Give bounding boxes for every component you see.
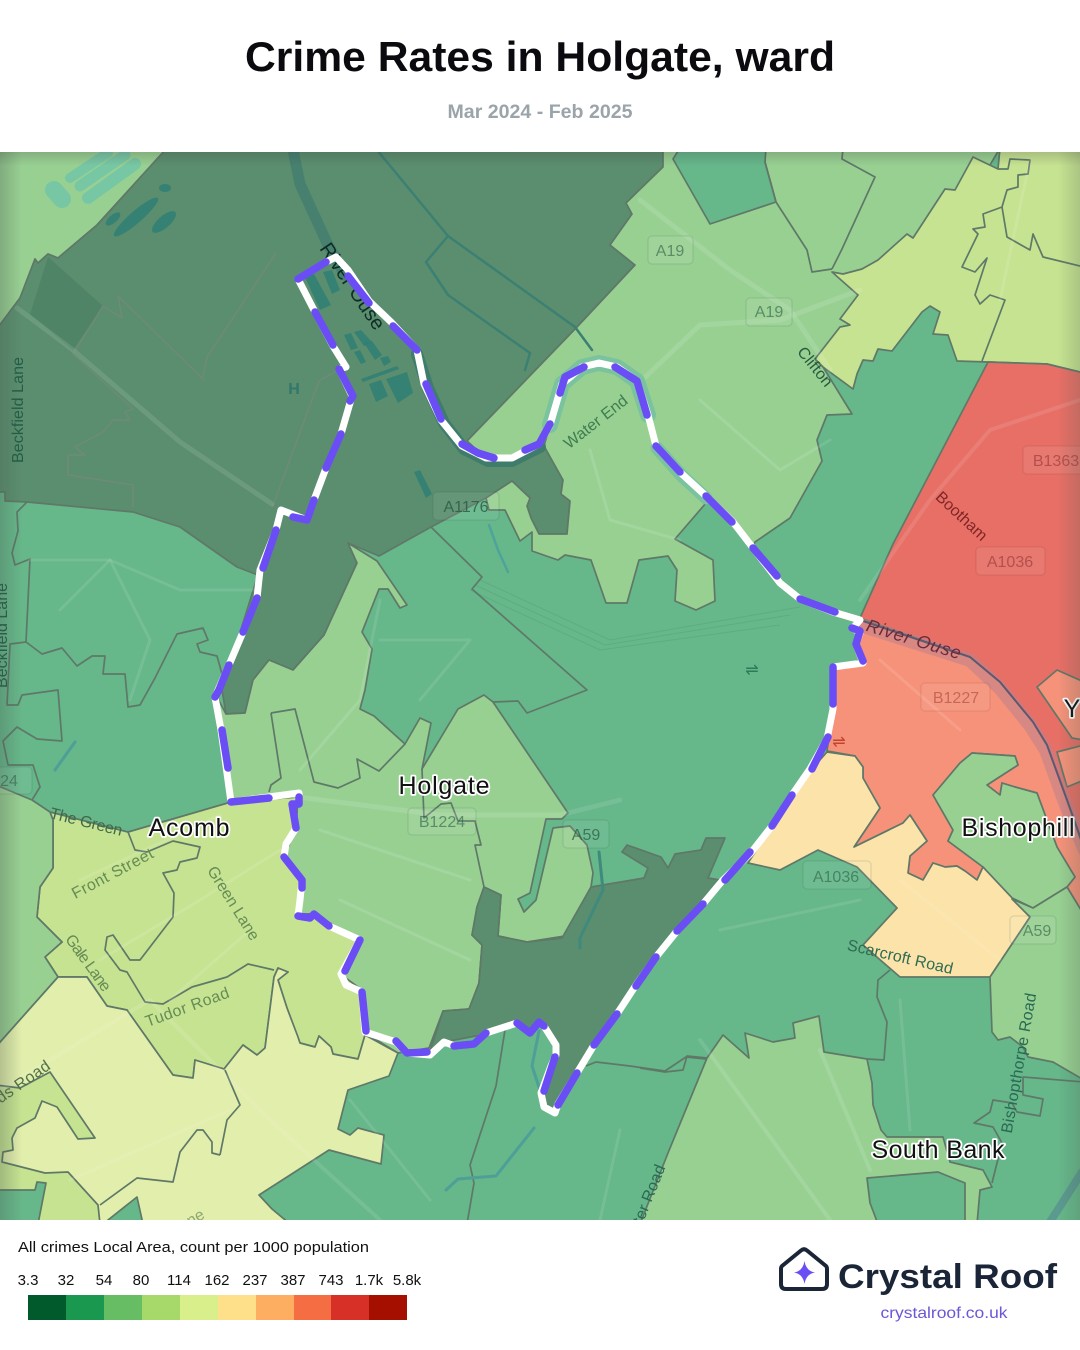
zone boundaries north	[765, 148, 1080, 361]
road number shields: B1224	[419, 814, 465, 831]
road number shields: A19	[755, 304, 783, 321]
place names: Bishophill	[962, 814, 1074, 842]
lake stripes top-left	[54, 153, 135, 199]
legend colour scale	[28, 1295, 407, 1320]
street names: Green Lane	[203, 863, 262, 944]
zone: Bishophill light green	[933, 753, 1075, 915]
zone: small medium green patches south-west	[0, 1182, 143, 1224]
zone: north dark green	[0, 148, 663, 714]
zone: Micklegate salmon	[827, 620, 1080, 915]
zone: Clifton lime	[815, 148, 1080, 389]
place names: South Bank	[872, 1136, 1005, 1164]
legend value labels: 237	[242, 1272, 268, 1289]
title: Crime Rates in Holgate, ward	[245, 33, 835, 80]
zone: Dringhouses pale yellow	[0, 968, 398, 1224]
website: crystalroof.co.uk	[880, 1305, 1009, 1322]
legend value labels: 32	[58, 1272, 74, 1289]
street names: The Green	[48, 805, 124, 840]
zone: Water End light green	[486, 363, 715, 610]
street names: H	[288, 381, 300, 398]
legend	[18, 1239, 422, 1320]
street names: Beckfield Lane	[10, 357, 27, 463]
legend value labels: 387	[280, 1272, 306, 1289]
internal ward lines	[3, 253, 1080, 1224]
brand name: Crystal Roof	[838, 1258, 1058, 1296]
street names: ter Road	[630, 1162, 669, 1226]
faint road network	[0, 160, 1080, 1220]
road number shields: B1227	[933, 690, 979, 707]
zone: Holgate light green	[217, 543, 593, 1053]
place names: Holgate	[398, 772, 490, 800]
road number shields: A59	[1023, 923, 1051, 940]
zone: South Bank light green	[640, 1016, 992, 1224]
railway lines	[470, 580, 800, 650]
legend value labels: 1.7k	[355, 1272, 384, 1289]
street names: ⇌	[832, 734, 846, 751]
legend value labels	[18, 1272, 422, 1289]
legend value labels: 5.8k	[393, 1272, 422, 1289]
road number shields: A1176	[443, 499, 489, 516]
street names: River Ouse	[315, 239, 389, 334]
street names: Gale Lane	[61, 932, 114, 995]
zone: west light green strip	[0, 785, 62, 1047]
map edge vignette	[0, 152, 1080, 1220]
road number shields: A19	[656, 243, 684, 260]
legend value labels: 743	[318, 1272, 344, 1289]
road number shields: 24	[0, 773, 18, 790]
street names: Water End	[561, 392, 631, 453]
street names: ⇌	[745, 662, 759, 679]
road number shields: A1036	[813, 869, 859, 886]
zone: south-east light green	[990, 887, 1080, 1080]
zone: Nunnery Lane cream	[748, 752, 1030, 977]
street names: Bishopthorpe Road	[999, 992, 1040, 1135]
logo: Crystal Roof	[781, 1249, 1058, 1322]
legend value labels: 3.3	[18, 1272, 38, 1289]
zone: south dark green	[429, 838, 725, 1113]
drains and river water	[55, 150, 1080, 1222]
zone: Bootham red	[860, 362, 1080, 860]
zone: York centre salmon islands	[1037, 670, 1080, 787]
ward boundary: purple dashes	[215, 262, 863, 1105]
street names: Bootham	[932, 489, 990, 545]
street names: ne	[184, 1206, 208, 1230]
legend value labels: 80	[133, 1272, 149, 1289]
subtitle: date range: Mar 2024 - Feb 2025	[448, 102, 633, 123]
legend title: All crimes Local Area, count per 1000 population	[18, 1239, 369, 1256]
legend value labels: 162	[204, 1272, 230, 1289]
ponds and water works	[104, 184, 432, 498]
legend value labels: 54	[96, 1272, 112, 1289]
zone: south-west lime patch	[0, 1072, 100, 1224]
street names: Scarcroft Road	[845, 937, 955, 978]
road number shields: B1363	[1033, 453, 1079, 470]
zone: north-east light green	[467, 148, 1000, 548]
place names: Acomb	[148, 814, 230, 842]
road number shields: A1036	[987, 554, 1033, 571]
legend value labels: 114	[167, 1272, 191, 1289]
street names: Clifton	[793, 344, 836, 390]
zone: darker dark green field	[30, 257, 103, 350]
ward boundary: white base	[215, 257, 863, 1113]
place names	[148, 695, 1080, 1164]
street names: River Ouse	[864, 615, 964, 663]
place names: Y	[1064, 695, 1080, 723]
street names: Tudor Road	[143, 985, 232, 1031]
zone: Acomb lime	[37, 797, 365, 1078]
road number shields	[0, 236, 1080, 944]
road number shields: A59	[572, 827, 600, 844]
street names: Front Street	[69, 845, 157, 903]
zone: top-left light green	[0, 148, 167, 330]
zone: top medium green block	[673, 148, 776, 224]
icon: house outline with star	[781, 1249, 827, 1289]
street names	[0, 239, 1040, 1230]
